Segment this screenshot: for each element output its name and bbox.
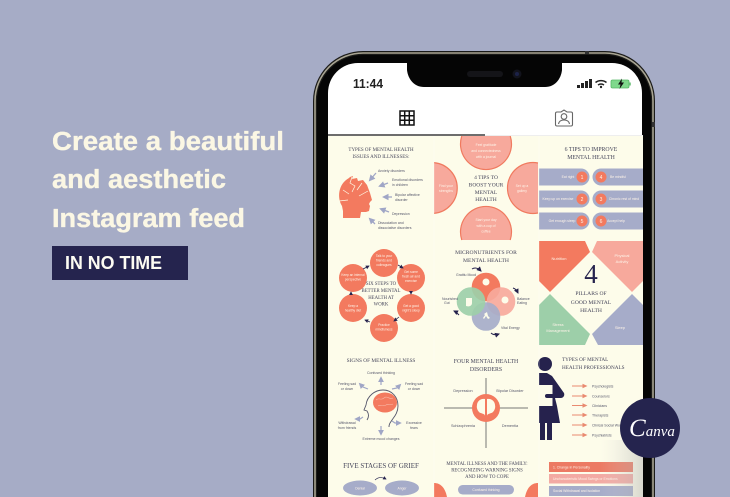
numbers: 2: [581, 197, 584, 203]
bar labels: Social Withdrawal and Isolation: [553, 489, 600, 493]
list labels: Dissociation and: [378, 221, 404, 225]
heading: SIGNS OF MENTAL ILLNESS: [347, 358, 415, 364]
heading: BETTER MENTAL: [362, 289, 401, 294]
step circles: [339, 249, 425, 342]
step labels: night's sleep: [402, 308, 420, 312]
heading: MENTAL HEALTH: [463, 258, 509, 264]
panel: 4 tips to boost: [434, 136, 538, 240]
sign labels: from friends: [338, 426, 356, 430]
profession list: Clinical Social Workers: [592, 424, 628, 428]
heading: ISSUES AND ILLNESSES:: [353, 155, 409, 160]
number circles: [576, 172, 606, 226]
numbers: 6: [600, 219, 603, 225]
pill: [458, 485, 514, 494]
status time: 11:44: [353, 77, 383, 91]
pillar labels: Management: [546, 328, 571, 333]
heading: 4 TIPS TO: [474, 175, 498, 181]
tip labels: Find your: [439, 184, 454, 188]
step labels: healthy diet: [345, 308, 361, 312]
pillar labels: Physical: [615, 253, 630, 258]
heading: HEALTH: [580, 308, 602, 314]
heading: TYPES OF MENTAL: [562, 357, 608, 363]
big number: 4: [584, 259, 598, 289]
step labels: Practice: [378, 323, 390, 327]
venn labels: Gut: [444, 301, 450, 305]
icon: cracked head: [339, 176, 372, 218]
numbers: 4: [600, 175, 603, 181]
disorder labels: Dementia: [502, 424, 519, 428]
pill label: Confused thinking: [472, 488, 500, 492]
panel: 6 tips to improve: [539, 147, 643, 230]
bar labels: 1. Change in Personality: [553, 466, 590, 470]
list labels: Anxiety disorders: [378, 169, 405, 173]
step labels: mindfulness: [375, 328, 393, 332]
venn labels: Vital Energy: [501, 326, 520, 330]
head outline with brain: [364, 390, 398, 427]
step labels: colleagues: [376, 263, 392, 267]
heading: FIVE STAGES OF GRIEF: [343, 462, 419, 470]
venn circles: [457, 273, 515, 331]
tip labels: Set up a: [516, 184, 528, 188]
panel: six steps: [339, 249, 425, 342]
stage ovals: [343, 480, 377, 496]
tab indicator: [328, 134, 643, 136]
pillar labels: Stress: [552, 322, 564, 327]
step labels: Talk to your: [376, 254, 393, 258]
heading: BOOST YOUR: [469, 182, 504, 188]
pill labels: Get enough sleep: [549, 219, 575, 223]
list labels: in children: [392, 183, 408, 187]
heading: AND HOW TO COPE: [465, 475, 509, 480]
arrows: [572, 386, 586, 435]
curved arrows: [454, 268, 518, 335]
panel: four mental health disorders: [444, 359, 528, 448]
tip labels: and connectedness: [471, 149, 501, 153]
step labels: exercise: [405, 279, 417, 283]
side shape right: [525, 483, 538, 497]
sign labels: Feeling sad: [405, 382, 423, 386]
heading: HEALTH: [475, 197, 497, 203]
icon: canva badge: Canva: [629, 415, 675, 442]
phone: [313, 51, 655, 497]
tip labels: strengths: [439, 189, 453, 193]
step labels: Get a good: [403, 304, 419, 308]
list labels: Depression: [392, 212, 410, 216]
numbers: 5: [581, 219, 584, 225]
heading: TYPES OF MENTAL HEALTH: [348, 148, 414, 153]
heading: 6 TIPS TO IMPROVE: [565, 147, 618, 153]
arrows: [370, 173, 392, 224]
disorder labels: Depression: [453, 389, 473, 393]
list labels: disorder: [395, 198, 408, 202]
heading: HEALTH AT: [368, 296, 394, 301]
list labels: Bipolar affective: [395, 193, 420, 197]
heading: DISORDERS: [470, 367, 502, 373]
pillar labels: Nutrition: [552, 256, 566, 261]
feed grid: [328, 136, 643, 497]
step arrows: [351, 265, 411, 322]
pillar diamonds: [539, 241, 590, 292]
panel: micronutrients: [442, 250, 530, 335]
heading: MENTAL HEALTH: [567, 155, 616, 161]
icon: professional figure: [538, 357, 564, 440]
notch: [407, 62, 562, 87]
numbers: 1: [581, 175, 584, 181]
side shape left: [434, 483, 447, 497]
heading: RECOGNIZING WARNING SIGNS: [451, 468, 523, 474]
sign labels: fears: [410, 426, 418, 430]
phone frame: [313, 51, 655, 497]
disorder labels: Bipolar Disorder: [496, 389, 524, 393]
profession list: Therapists: [592, 414, 609, 418]
screen: [328, 63, 642, 497]
step labels: fresh air and: [402, 274, 420, 278]
headline: Instagram feed: [52, 205, 245, 233]
heading: FOUR MENTAL HEALTH: [454, 359, 519, 365]
profession list: Psychologists: [592, 384, 614, 388]
step labels: Get some: [404, 270, 418, 274]
sign labels: Extreme mood changes: [363, 437, 400, 441]
pill labels: Accept help: [607, 219, 625, 223]
venn labels: Eating: [517, 301, 527, 305]
heading: GOOD MENTAL: [571, 300, 612, 306]
profession list: Clinicians: [592, 404, 607, 408]
status icons: [577, 78, 631, 89]
step labels: Keep an internal: [341, 273, 365, 277]
panel: types of mental health issues: [339, 148, 423, 230]
venn labels: Gratitu Mood: [456, 273, 476, 277]
stage labels: Anger: [397, 486, 407, 490]
venn labels: Balance: [517, 297, 530, 301]
badge: in no time: [52, 246, 188, 280]
venn labels: Nourished: [442, 297, 458, 301]
pill labels: Eat right: [562, 175, 574, 179]
panel: signs of mental illness: [338, 358, 423, 441]
disorder labels: Schizophrenia: [451, 424, 476, 428]
bar labels: Uncharacteristic Mood Swings or Emotions: [553, 477, 618, 481]
headline: [52, 128, 284, 233]
tip circles: [434, 136, 538, 240]
sign labels: or down: [341, 387, 353, 391]
sign labels: Confused thinking: [367, 371, 395, 375]
stage arrow: [375, 478, 386, 480]
pill labels: Chronic rest of mind: [609, 197, 639, 201]
pillar labels: Sleep: [615, 325, 626, 330]
tip labels: with a cup of: [476, 224, 496, 228]
panel: five stages of grief: [343, 462, 419, 496]
panel: mental illness and the family: [434, 462, 538, 497]
profession list: Counselors: [592, 394, 610, 398]
tip labels: with a journal: [476, 155, 496, 159]
sign labels: Withdrawal: [338, 421, 356, 425]
tip labels: gallery: [517, 189, 527, 193]
headline: and aesthetic: [52, 166, 226, 194]
cross lines: [444, 378, 528, 448]
pills: [539, 168, 643, 230]
heading: MICRONUTRIENTS FOR: [455, 250, 517, 256]
icon: canva badge: [620, 398, 680, 458]
tip labels: coffee: [481, 230, 491, 234]
pillar labels: Activity: [616, 259, 628, 264]
heading: WORK: [374, 302, 389, 308]
heading: PILLARS OF: [575, 291, 607, 297]
icon: tagged tab: [556, 110, 572, 126]
numbers: 3: [600, 197, 603, 203]
screen edge shade: [600, 440, 643, 497]
profession list: Psychiatrists: [592, 434, 612, 438]
heading: MENTAL: [475, 190, 498, 196]
venn icons: [466, 278, 508, 319]
sign labels: Feeling sad: [338, 382, 356, 386]
list labels: dissociative disorders: [378, 226, 412, 230]
sign arrows: [356, 378, 400, 434]
headline: Create a beautiful: [52, 128, 284, 156]
pill labels: Keep up on exercise: [543, 197, 574, 201]
heading: HEALTH PROFESSIONALS: [562, 365, 625, 371]
badge: in no time: IN NO TIME: [65, 253, 162, 273]
step labels: Keep a: [348, 304, 358, 308]
tip labels: Feel gratitude: [476, 143, 496, 147]
sign labels: Excessive: [406, 421, 422, 425]
icon: grid tab: [400, 111, 414, 125]
pill labels: Be mindful: [610, 175, 626, 179]
heading: MENTAL ILLNESS AND THE FAMILY:: [446, 462, 528, 467]
sign labels: or down: [408, 387, 420, 391]
brain circle: [472, 394, 500, 422]
tip labels: Start your day: [475, 218, 497, 222]
list labels: Emotional disorders: [392, 178, 423, 182]
heading: SIX STEPS TO: [366, 282, 397, 287]
panel: warning bars: [549, 462, 633, 496]
panel: 4 pillars: [539, 241, 643, 345]
panel: mental health professionals: [538, 357, 628, 440]
step labels: friends and: [376, 258, 392, 262]
stage labels: Denial: [355, 486, 365, 490]
step labels: perspective: [345, 278, 361, 282]
